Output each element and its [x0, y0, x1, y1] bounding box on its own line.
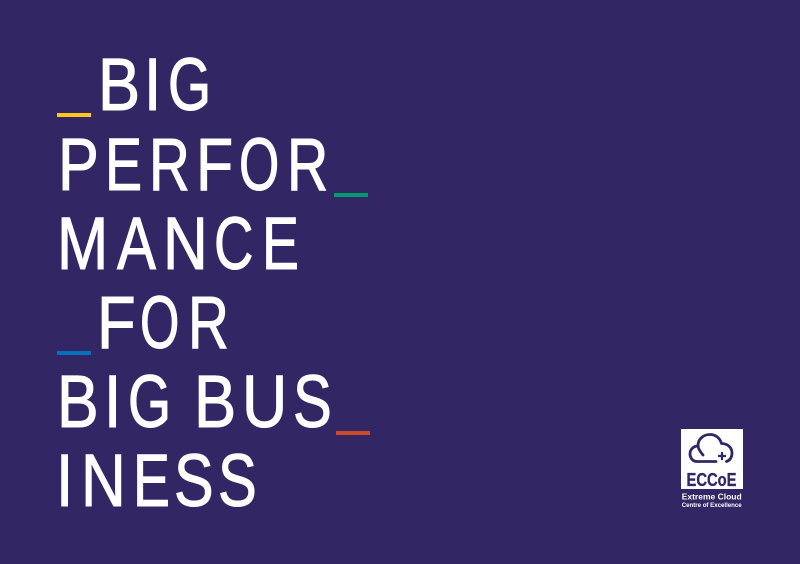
title line: BIG	[98, 42, 211, 126]
title line: FOR: F	[97, 280, 136, 364]
title line: PERFOR: O	[239, 122, 279, 206]
title line: INESS: S	[174, 439, 213, 522]
title line: PERFOR	[58, 122, 329, 206]
title line: PERFOR: F	[196, 122, 233, 206]
title line: BIG: G	[168, 42, 211, 126]
title line: BIG BUS: S	[293, 360, 331, 443]
icon: cloud with plus	[690, 434, 732, 462]
title line: MANCE: N	[163, 202, 208, 284]
title line: MANCE: A	[117, 202, 156, 284]
title line: BIG BUS: G	[128, 360, 171, 443]
title line: FOR: R	[188, 280, 229, 364]
logo wordmark: ECCoE	[686, 470, 736, 490]
title line: BIG BUS: B	[57, 360, 99, 443]
title line: INESS: S	[218, 439, 256, 522]
title line: PERFOR: R	[287, 122, 329, 206]
accent: blue underscore	[57, 351, 91, 355]
title line: FOR	[97, 280, 229, 364]
accent: red underscore	[336, 431, 370, 435]
logo: ECCoE	[681, 429, 743, 509]
title: big performance for big business	[56, 42, 331, 522]
title line: PERFOR: E	[104, 122, 142, 206]
title line: PERFOR: R	[149, 122, 190, 206]
title line: MANCE	[57, 202, 298, 284]
logo caption: Centre of Excellence: Centre of Excellence	[682, 502, 742, 509]
logo caption: Extreme Cloud: Extreme Cloud	[682, 492, 742, 502]
accent: green underscore	[334, 193, 368, 197]
title line: INESS	[56, 439, 256, 522]
title line: MANCE: E	[262, 202, 298, 284]
logo white tile	[681, 429, 743, 489]
title line: INESS: E	[132, 439, 169, 522]
title line: INESS: N	[81, 439, 125, 522]
accent: yellow underscore	[57, 113, 91, 117]
title line: INESS: I	[56, 439, 74, 522]
title line: BIG BUS: I	[104, 360, 121, 443]
title line: MANCE: M	[57, 202, 109, 284]
title line: BIG BUS	[57, 360, 331, 443]
title line: FOR: O	[140, 280, 179, 364]
title line: MANCE: C	[214, 202, 254, 284]
title line: BIG: I	[144, 42, 161, 126]
title line: BIG: B	[98, 42, 140, 126]
title line: BIG BUS: U	[242, 360, 287, 443]
title line: BIG BUS: B	[194, 360, 237, 443]
title line: PERFOR: P	[58, 122, 98, 206]
